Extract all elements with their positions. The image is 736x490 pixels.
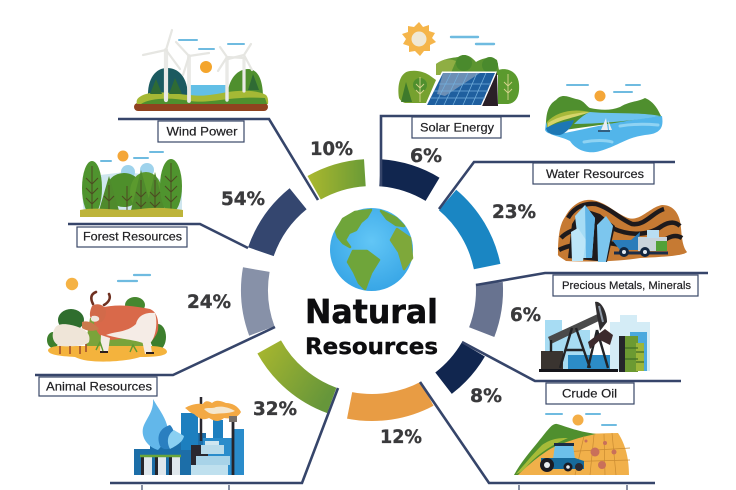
label: solar energy: Solar Energy — [420, 120, 494, 134]
icon: water landscape — [545, 85, 662, 152]
segment: crude oil 8% — [435, 343, 485, 394]
label: forest resources: Forest Resources — [83, 230, 182, 244]
icon: forest landscape — [80, 150, 183, 217]
leader line: energy — [110, 388, 338, 483]
label: animal resources — [39, 377, 157, 396]
icon: cow and sheep — [47, 275, 167, 362]
leader line: solar energy — [381, 116, 530, 186]
segment: energy 32% — [257, 340, 336, 413]
leader line: forest resources — [68, 224, 248, 248]
leader line: animal resources — [35, 327, 275, 375]
title: Natural — [305, 292, 438, 331]
segment: forest resources 54% — [248, 188, 307, 256]
percentage: forest resources: 54% — [221, 189, 265, 210]
label: precious metals: Precious Metals, Minerals — [562, 280, 692, 292]
label: animal resources: Animal Resources — [46, 380, 152, 394]
label: water resources: Water Resources — [546, 167, 644, 181]
icon: globe — [330, 208, 413, 291]
label: wind power — [158, 121, 244, 142]
leader line: agriculture — [420, 382, 655, 483]
segment: wind power 10% — [308, 159, 366, 200]
ring chart — [241, 159, 503, 421]
label: energy (cropped box) — [142, 485, 229, 490]
percentage: precious metals: 6% — [510, 305, 541, 326]
segment: solar energy 6% — [379, 159, 440, 201]
title — [305, 292, 438, 360]
icon: energy plant with flames — [134, 397, 244, 475]
label: solar energy — [412, 117, 501, 138]
leader line: wind power — [118, 119, 318, 200]
segment: agriculture 12% — [347, 382, 434, 421]
icon: solar energy landscape — [398, 22, 519, 106]
segment: animal resources 24% — [241, 267, 274, 336]
percentage: energy: 32% — [253, 399, 297, 420]
title: Resources — [305, 334, 438, 360]
label: crude oil — [546, 383, 634, 404]
leader line: precious metals — [476, 273, 708, 285]
percentage: agriculture: 12% — [380, 427, 422, 448]
label: agriculture (cropped box) — [519, 485, 627, 490]
percentage: wind power: 10% — [310, 139, 353, 160]
percentage: solar energy: 6% — [410, 146, 442, 167]
label: crude oil: Crude Oil — [562, 386, 617, 400]
icon: mine with crystals and truck — [558, 200, 687, 262]
percentage: crude oil: 8% — [470, 386, 502, 407]
leader line: crude oil — [462, 342, 681, 381]
segment: precious metals 6% — [469, 282, 503, 337]
leader line: water resources — [439, 162, 675, 209]
icon: wind power landscape — [134, 30, 268, 111]
label: forest resources — [77, 227, 187, 247]
icon: farm and tractor — [514, 414, 630, 475]
percentage: water resources: 23% — [492, 202, 536, 223]
percentage: animal resources: 24% — [187, 292, 231, 313]
label: precious metals — [553, 275, 698, 296]
icon: oil pump jack — [539, 302, 650, 372]
label: wind power: Wind Power — [166, 124, 238, 138]
segment: water resources 23% — [439, 190, 500, 269]
label: water resources — [533, 163, 654, 184]
